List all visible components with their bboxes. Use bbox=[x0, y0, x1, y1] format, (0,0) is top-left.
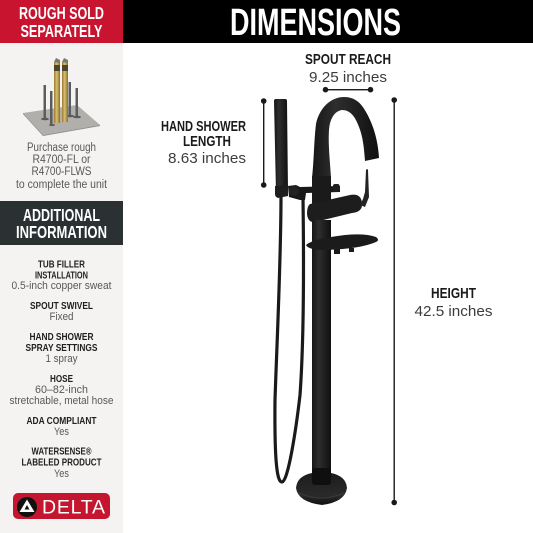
spout bbox=[312, 97, 379, 178]
panel: additional information heading bbox=[0, 201, 123, 245]
label: spout reach bbox=[305, 51, 391, 86]
column bbox=[312, 220, 331, 482]
text: tub filler installation bbox=[12, 258, 112, 292]
text: hose bbox=[10, 373, 114, 407]
text: tub filler installation: 0.5-inch copper sweat bbox=[12, 280, 112, 292]
panel: rough sold separately heading: SEPARATELY bbox=[20, 21, 103, 41]
icon: rough valve product image bbox=[23, 58, 100, 136]
text: purchase rough: R4700-FLWS bbox=[32, 166, 92, 178]
panel: additional information heading: INFORMATION bbox=[16, 222, 107, 242]
logo: delta: DELTA bbox=[42, 496, 105, 518]
text: purchase rough: Purchase rough bbox=[27, 142, 96, 154]
label: spout reach: 9.25 inches bbox=[309, 69, 387, 86]
logo: delta bbox=[13, 493, 110, 519]
hose bbox=[275, 195, 304, 482]
text: watersense labeled product bbox=[22, 446, 102, 480]
text: watersense labeled product: Yes bbox=[54, 468, 69, 480]
base rim highlight bbox=[299, 493, 344, 498]
arrow: height dimension line bbox=[391, 97, 397, 505]
label: height: 42.5 inches bbox=[414, 303, 492, 320]
hand shower cradle bbox=[275, 185, 288, 198]
label: hand shower length: HAND SHOWER bbox=[161, 118, 246, 135]
label: hand shower length: 8.63 inches bbox=[168, 150, 246, 167]
base bbox=[296, 473, 347, 505]
label: height: HEIGHT bbox=[431, 285, 476, 302]
arrow: spout reach dimension line bbox=[323, 87, 373, 92]
holder arm bbox=[288, 185, 340, 200]
text: ada compliant: ADA COMPLIANT bbox=[26, 415, 97, 427]
text: hand shower spray settings: SPRAY SETTINGS bbox=[26, 342, 98, 354]
diverter knob bbox=[333, 184, 340, 192]
valve body bbox=[307, 195, 362, 222]
text: hose: HOSE bbox=[50, 373, 73, 385]
panel: rough sold separately heading bbox=[0, 0, 123, 43]
panel: rough sold separately heading: ROUGH SOLD bbox=[19, 3, 104, 23]
text: purchase rough: R4700-FL or bbox=[32, 154, 91, 166]
text: hand shower spray settings bbox=[26, 331, 98, 365]
soap tray bbox=[306, 234, 378, 250]
text: watersense labeled product: WATERSENSE® bbox=[32, 446, 92, 458]
text: ada compliant: Yes bbox=[54, 426, 69, 438]
text: purchase rough: to complete the unit bbox=[16, 179, 108, 191]
icon: tub filler faucet bbox=[274, 97, 379, 505]
hand shower bbox=[274, 99, 288, 193]
label: hand shower length: LENGTH bbox=[183, 133, 231, 150]
tray fittings bbox=[334, 248, 354, 254]
label: hand shower length bbox=[161, 118, 246, 167]
text: ada compliant bbox=[26, 415, 97, 438]
panel: additional information heading: ADDITIONAL bbox=[23, 205, 100, 225]
title: dimensions bbox=[123, 0, 533, 44]
lever handle bbox=[360, 169, 369, 207]
text: hose: 60–82-inch bbox=[35, 384, 88, 396]
text: purchase rough bbox=[16, 142, 108, 191]
text: watersense labeled product: LABELED PRODUCT bbox=[22, 456, 102, 468]
label: height bbox=[414, 285, 492, 320]
text: hose: stretchable, metal hose bbox=[10, 395, 114, 407]
text: hand shower spray settings: 1 spray bbox=[46, 353, 78, 365]
arrow: hand shower dimension line bbox=[261, 98, 267, 188]
text: spout swivel: SPOUT SWIVEL bbox=[30, 300, 93, 312]
left sidebar background bbox=[0, 0, 123, 533]
label: spout reach: SPOUT REACH bbox=[305, 51, 391, 68]
text: tub filler installation: INSTALLATION bbox=[35, 270, 88, 282]
spout neck bbox=[312, 176, 331, 206]
text: spout swivel bbox=[30, 300, 93, 323]
text: spout swivel: Fixed bbox=[50, 311, 74, 323]
text: hand shower spray settings: HAND SHOWER bbox=[30, 331, 94, 343]
title: dimensions: DIMENSIONS bbox=[230, 2, 401, 44]
text: tub filler installation: TUB FILLER bbox=[38, 258, 85, 270]
